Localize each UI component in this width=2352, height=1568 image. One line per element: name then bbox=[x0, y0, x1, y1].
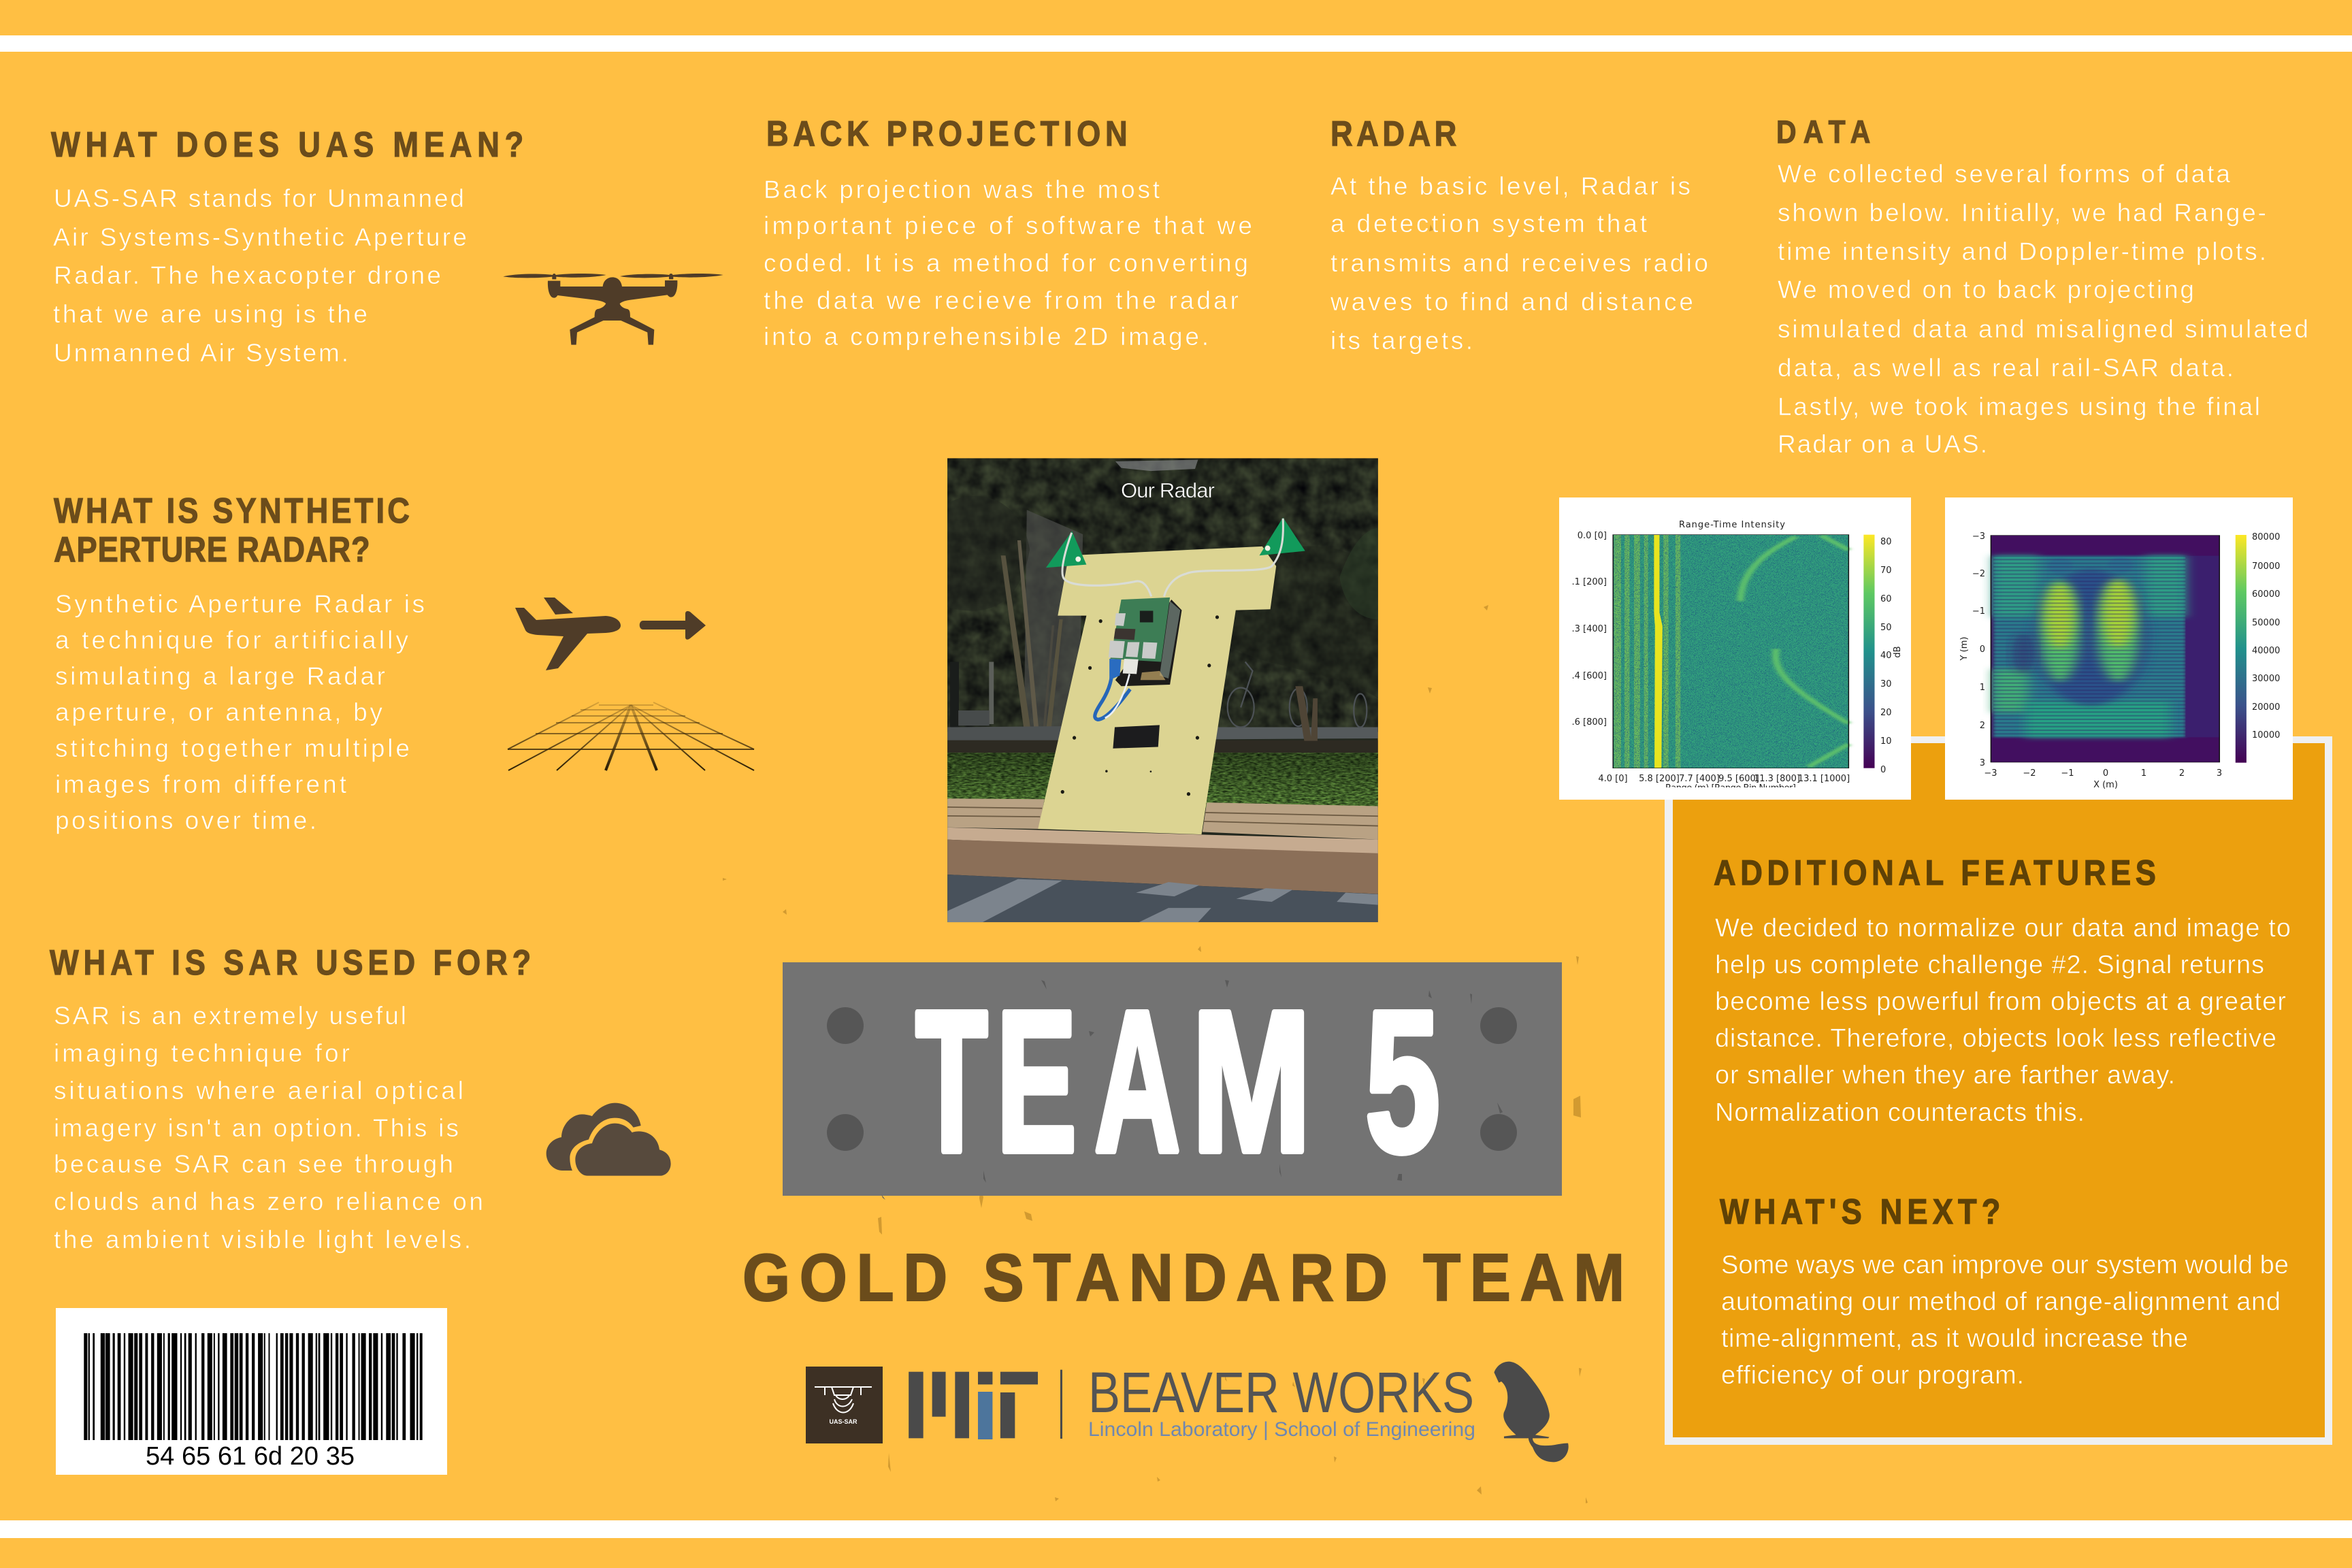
banner title: A bbox=[1094, 970, 1180, 1194]
colorbar labels bbox=[2252, 532, 2280, 740]
additional features body: distance. Therefore, objects look less reflective bbox=[1715, 1024, 2276, 1053]
body text: Air Systems-Synthetic Aperture bbox=[53, 223, 467, 251]
x tick labels: 3 bbox=[2217, 768, 2222, 779]
colorbar labels: 20 bbox=[1880, 708, 1892, 718]
heading: DATA bbox=[1776, 114, 1870, 150]
chart: back projection image bbox=[1945, 497, 2293, 800]
y tick labels bbox=[1972, 532, 1985, 768]
colorbar labels: 70000 bbox=[2252, 561, 2280, 572]
y tick labels: .3 [400] bbox=[1572, 624, 1607, 634]
colorbar labels: 50000 bbox=[2252, 618, 2280, 628]
x tick labels: 9.5 [600] bbox=[1718, 774, 1759, 784]
x tick labels: 11.3 [800] bbox=[1754, 774, 1800, 784]
body text: the ambient visible light levels. bbox=[54, 1226, 471, 1254]
body text bbox=[1778, 160, 2308, 458]
body text: At the basic level, Radar is bbox=[1330, 172, 1690, 200]
body text bbox=[54, 1002, 483, 1254]
what's next body: time-alignment, as it would increase the bbox=[1721, 1324, 2188, 1353]
body text: data, as well as real rail-SAR data. bbox=[1778, 354, 2234, 382]
y tick labels: 2 bbox=[1980, 721, 1985, 731]
heading: WHAT IS SYNTHETIC bbox=[54, 491, 410, 531]
body text bbox=[53, 184, 467, 367]
colorbar labels: 40 bbox=[1880, 651, 1892, 661]
heading: APERTURE RADAR? bbox=[54, 530, 370, 570]
heatmap bbox=[1613, 535, 1875, 768]
what's next body: efficiency of our program. bbox=[1721, 1361, 2024, 1390]
body text: its targets. bbox=[1330, 327, 1473, 355]
panel: additional features and what's next bbox=[1665, 736, 2332, 1445]
colorbar unit: dB bbox=[1893, 646, 1903, 658]
colorbar labels: 10 bbox=[1880, 736, 1892, 747]
chart title: Range-Time Intensity bbox=[1679, 520, 1785, 530]
body text: aperture, or antenna, by bbox=[55, 698, 382, 726]
heatmap bbox=[1991, 535, 2247, 763]
colorbar labels bbox=[1880, 537, 1892, 775]
panel: radar bbox=[1330, 114, 1708, 355]
body text: shown below. Initially, we had Range- bbox=[1778, 199, 2266, 227]
panel: what does UAS mean bbox=[51, 125, 523, 367]
body text: time intensity and Doppler-time plots. bbox=[1778, 238, 2266, 265]
panel: what is SAR used for bbox=[50, 943, 531, 1254]
y tick labels: .6 [800] bbox=[1572, 717, 1607, 728]
x tick labels: 5.8 [200] bbox=[1639, 774, 1680, 784]
barcode bbox=[56, 1308, 447, 1475]
body text: Unmanned Air System. bbox=[54, 339, 348, 367]
barcode bars bbox=[84, 1333, 423, 1440]
y tick labels bbox=[1572, 531, 1607, 728]
colorbar labels: 30000 bbox=[2252, 674, 2280, 684]
body text bbox=[55, 590, 425, 834]
colorbar labels: 0 bbox=[1880, 765, 1886, 775]
logo: UAS-SAR bbox=[806, 1367, 883, 1443]
banner title: 5 bbox=[1365, 970, 1440, 1194]
colorbar labels: 50 bbox=[1880, 623, 1892, 633]
body text: the data we recieve from the radar bbox=[764, 287, 1239, 314]
photo caption: Our Radar bbox=[1121, 478, 1215, 502]
additional features body: Normalization counteracts this. bbox=[1715, 1098, 2085, 1127]
body text: Radar. The hexacopter drone bbox=[54, 261, 441, 289]
icon: drone bbox=[503, 274, 723, 345]
body text: clouds and has zero reliance on bbox=[54, 1188, 483, 1215]
x tick labels: 13.1 [1000] bbox=[1798, 774, 1850, 784]
panel: data bbox=[1776, 114, 2308, 458]
body text: a technique for artificially bbox=[55, 626, 408, 654]
x tick labels: −2 bbox=[2023, 768, 2036, 779]
body text: simulated data and misaligned simulated bbox=[1778, 315, 2308, 343]
what's next body: automating our method of range-alignment and bbox=[1721, 1288, 2281, 1316]
x tick labels: 0 bbox=[2103, 768, 2108, 779]
x tick labels bbox=[1599, 774, 1850, 783]
additional features body: or smaller when they are farther away. bbox=[1715, 1061, 2175, 1090]
y tick labels: .1 [200] bbox=[1572, 577, 1607, 587]
body text: SAR is an extremely useful bbox=[54, 1002, 406, 1030]
colorbar labels: 80 bbox=[1880, 537, 1892, 547]
logo: Beaver Works: Lincoln Laboratory | School of Engineering bbox=[1088, 1418, 1475, 1441]
heading: WHAT IS SAR USED FOR? bbox=[50, 943, 531, 983]
additional features heading: ADDITIONAL FEATURES bbox=[1714, 853, 2156, 893]
body text: stitching together multiple bbox=[55, 734, 410, 762]
heading: RADAR bbox=[1330, 114, 1456, 154]
title: gold standard team: GOLD STANDARD TEAM bbox=[742, 1241, 1624, 1315]
heading: BACK PROJECTION bbox=[766, 114, 1128, 154]
what's next body bbox=[1721, 1251, 2289, 1390]
barcode number: 54 65 61 6d 20 35 bbox=[146, 1442, 355, 1471]
y tick labels: 3 bbox=[1980, 758, 1985, 768]
body text: coded. It is a method for converting bbox=[764, 249, 1248, 277]
arrow bbox=[640, 611, 706, 640]
body text: that we are using is the bbox=[53, 300, 368, 328]
body text: imaging technique for bbox=[54, 1039, 350, 1067]
logo: MIT bbox=[909, 1370, 1062, 1439]
colorbar labels: 60000 bbox=[2252, 589, 2280, 600]
body text: We collected several forms of data bbox=[1778, 160, 2230, 188]
colorbar labels: 70 bbox=[1880, 566, 1892, 576]
body text: a detection system that bbox=[1330, 210, 1648, 238]
logo: Beaver Works: BEAVER WORKS bbox=[1088, 1360, 1474, 1424]
icon: clouds bbox=[546, 1103, 671, 1176]
what's next heading: WHAT'S NEXT? bbox=[1720, 1192, 2000, 1232]
colorbar labels: 60 bbox=[1880, 594, 1892, 604]
what's next body: Some ways we can improve our system would be bbox=[1721, 1251, 2289, 1279]
banner: team 5 bbox=[783, 962, 1562, 1200]
colorbar labels: 10000 bbox=[2252, 730, 2280, 740]
body text: waves to find and distance bbox=[1330, 288, 1693, 316]
y tick labels: 0 bbox=[1980, 644, 1985, 655]
body text: UAS-SAR stands for Unmanned bbox=[54, 184, 464, 212]
chart: range-time intensity bbox=[1559, 497, 1911, 800]
panel: back projection bbox=[764, 114, 1252, 350]
additional features body: We decided to normalize our data and image to bbox=[1715, 914, 2291, 943]
body text: into a comprehensible 2D image. bbox=[764, 323, 1209, 350]
x tick labels: −3 bbox=[1984, 768, 1997, 779]
body text: positions over time. bbox=[55, 806, 316, 834]
body text: because SAR can see through bbox=[54, 1150, 453, 1178]
x axis label: X (m) bbox=[2093, 780, 2118, 790]
photo: our radar bbox=[947, 458, 1378, 922]
colorbar labels: 80000 bbox=[2252, 532, 2280, 542]
banner title bbox=[916, 969, 1440, 1194]
x tick labels: −1 bbox=[2061, 768, 2074, 779]
icon: perspective grid bbox=[508, 702, 754, 770]
body text: Synthetic Aperture Radar is bbox=[55, 590, 425, 618]
banner title: E bbox=[996, 969, 1077, 1194]
banner title: T bbox=[916, 970, 987, 1194]
logo: UAS-SAR: UAS-SAR bbox=[829, 1418, 858, 1425]
body text: imagery isn't an option. This is bbox=[54, 1114, 459, 1142]
body text: situations where aerial optical bbox=[54, 1077, 463, 1105]
y tick labels: −3 bbox=[1972, 532, 1985, 542]
body text: Lastly, we took images using the final bbox=[1778, 393, 2260, 421]
banner title: M bbox=[1192, 970, 1311, 1194]
x tick labels: 2 bbox=[2179, 768, 2185, 779]
body text: important piece of software that we bbox=[764, 212, 1252, 240]
x tick labels bbox=[1984, 768, 2222, 779]
y tick labels: −1 bbox=[1972, 606, 1985, 617]
body text: simulating a large Radar bbox=[55, 662, 385, 690]
body text: transmits and receives radio bbox=[1330, 249, 1708, 277]
banner bolts bbox=[827, 1007, 1517, 1151]
y tick labels: .4 [600] bbox=[1572, 671, 1607, 681]
additional features body bbox=[1715, 914, 2291, 1127]
y tick labels: −2 bbox=[1972, 569, 1985, 579]
body text bbox=[1330, 172, 1708, 355]
logo: Beaver Works bbox=[1088, 1360, 1475, 1441]
colorbar labels: 40000 bbox=[2252, 646, 2280, 656]
additional features body: help us complete challenge #2. Signal returns bbox=[1715, 951, 2264, 979]
y tick labels: 1 bbox=[1980, 683, 1985, 693]
x axis label: Range (m) [Range Bin Number] bbox=[1665, 783, 1796, 794]
x tick labels: 1 bbox=[2141, 768, 2146, 779]
colorbar labels: 30 bbox=[1880, 679, 1892, 689]
body text: Back projection was the most bbox=[764, 176, 1160, 203]
heading bbox=[54, 491, 410, 570]
colorbar labels: 20000 bbox=[2252, 702, 2280, 713]
heading: WHAT DOES UAS MEAN? bbox=[51, 125, 523, 165]
body text bbox=[764, 176, 1252, 350]
icon: beaver bbox=[1494, 1362, 1569, 1462]
panel: synthetic aperture radar bbox=[54, 491, 425, 834]
icon: airplane bbox=[515, 598, 621, 670]
additional features body: become less powerful from objects at a greater bbox=[1715, 987, 2286, 1016]
body text: images from different bbox=[55, 770, 347, 798]
body text: We moved on to back projecting bbox=[1778, 276, 2194, 304]
y axis label: Y (m) bbox=[1959, 637, 1970, 661]
y tick labels: 0.0 [0] bbox=[1578, 531, 1607, 541]
body text: Radar on a UAS. bbox=[1778, 430, 1987, 458]
x tick labels: 4.0 [0] bbox=[1598, 774, 1628, 784]
x tick labels: 7.7 [400] bbox=[1679, 774, 1720, 784]
